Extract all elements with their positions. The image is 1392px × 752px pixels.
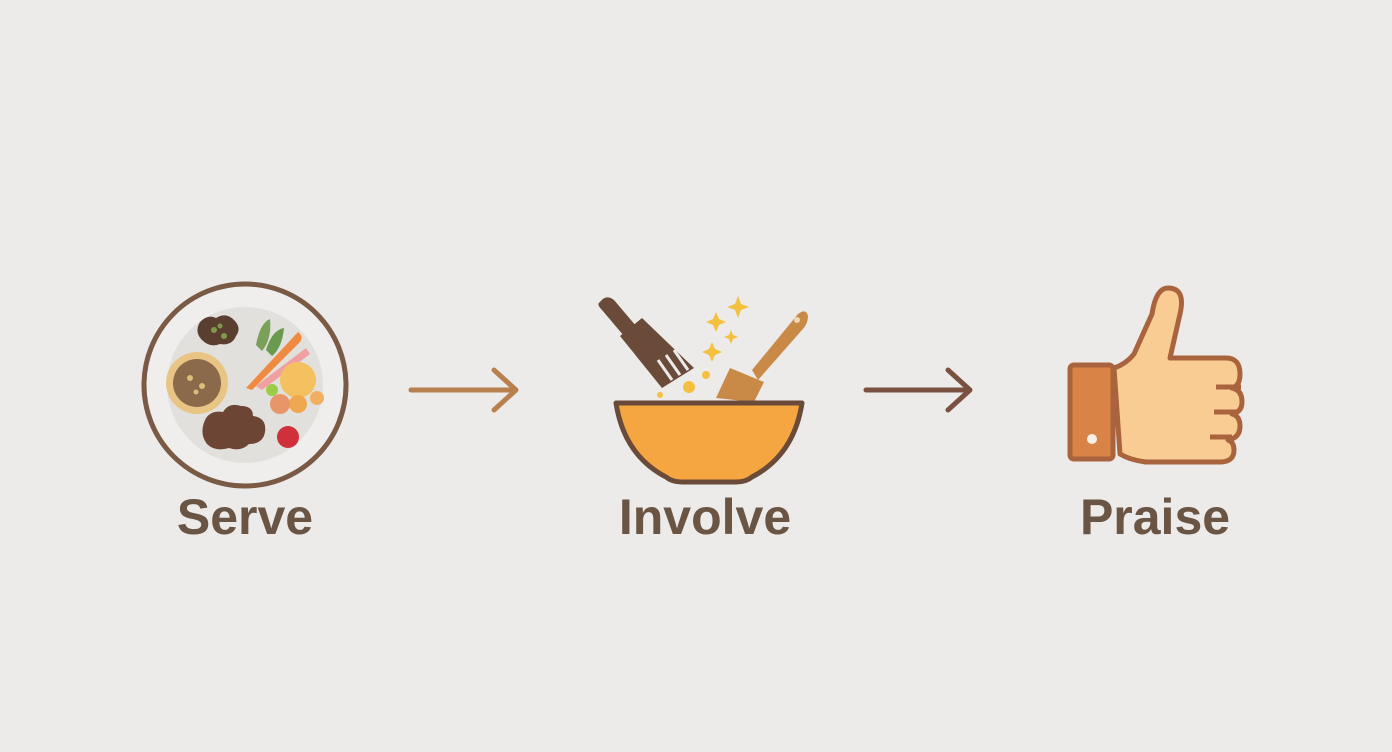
step: serve: [144, 284, 346, 545]
label: Praise: Praise: [1080, 489, 1230, 545]
icon: thumbs up: [1070, 288, 1242, 462]
label: Involve: Involve: [619, 489, 791, 545]
arrow 1: [411, 370, 516, 410]
icon: mixing bowl with utensils: [598, 296, 808, 482]
step: involve: [598, 296, 808, 545]
step: praise: [1070, 288, 1242, 545]
label: Serve: Serve: [177, 489, 313, 545]
arrow 2: [866, 370, 970, 410]
icon: plate of food: [144, 284, 346, 486]
